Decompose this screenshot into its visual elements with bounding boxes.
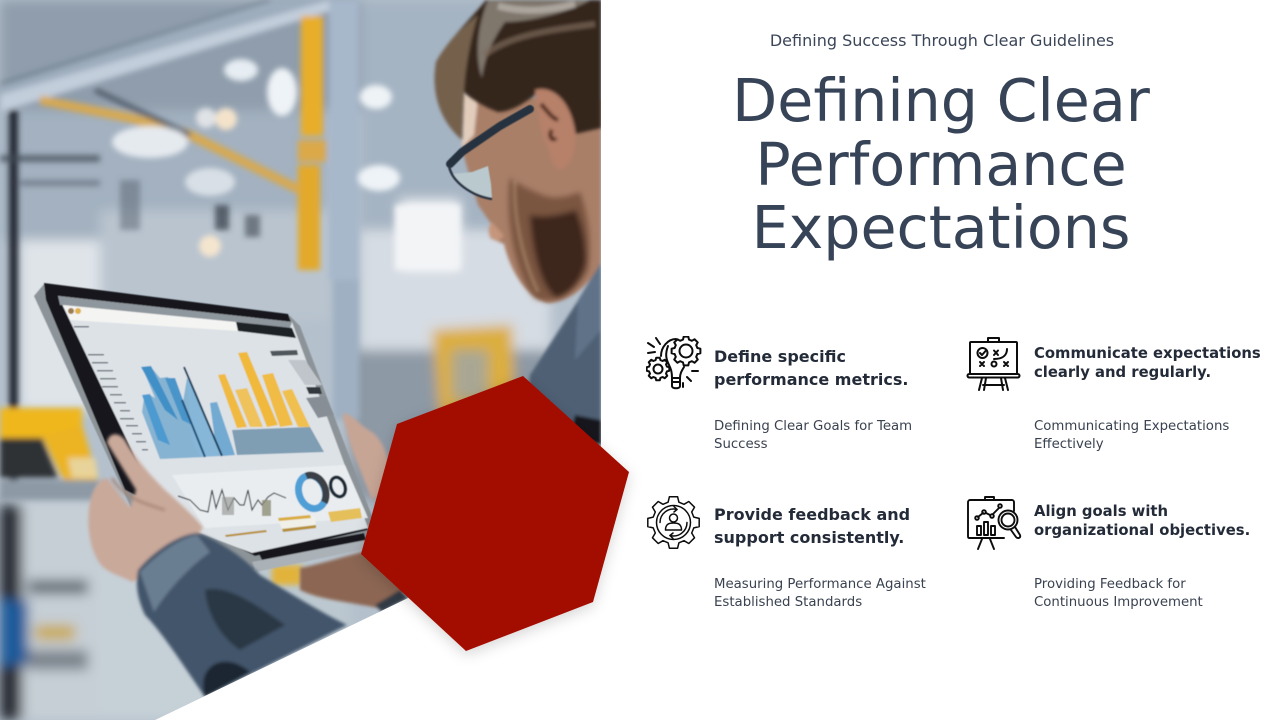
tablet with dashboard bbox=[34, 283, 378, 572]
main title: Defining Clear bbox=[732, 67, 1150, 135]
heading: align goals: Align goals with bbox=[1034, 503, 1168, 520]
heading: align goals bbox=[1034, 503, 1250, 539]
subtitle: Defining Success Through Clear Guidelines bbox=[770, 31, 1114, 50]
heading: communicate expectations: Communicate expectations bbox=[1034, 345, 1261, 362]
main title: Expectations bbox=[752, 194, 1130, 262]
description: define metrics bbox=[714, 419, 912, 452]
heading: provide feedback: Provide feedback and bbox=[714, 505, 910, 524]
description: communicate expectations: Communicating Expectations bbox=[1034, 419, 1229, 434]
heading: define metrics: performance metrics. bbox=[714, 370, 908, 389]
item: provide feedback bbox=[647, 496, 926, 610]
heading: communicate expectations: clearly and regularly. bbox=[1034, 364, 1211, 381]
icon: gear with person bbox=[647, 496, 700, 549]
description: provide feedback: Measuring Performance Against bbox=[714, 577, 926, 592]
heading: communicate expectations bbox=[1034, 345, 1261, 381]
main title bbox=[732, 67, 1150, 262]
icon: strategy board bbox=[966, 337, 1020, 391]
description: define metrics: Defining Clear Goals for Team bbox=[714, 419, 912, 434]
heading: align goals: organizational objectives. bbox=[1034, 522, 1250, 539]
photo: engineer reviewing tablet dashboard in factory bbox=[0, 0, 632, 720]
red hexagon bbox=[361, 376, 629, 651]
hands and sleeve bbox=[88, 414, 408, 697]
description: define metrics: Success bbox=[714, 437, 768, 452]
man's head bbox=[435, 0, 601, 445]
icon: lightbulb with gears bbox=[646, 336, 702, 390]
heading: define metrics: Define specific bbox=[714, 347, 846, 366]
description: provide feedback bbox=[714, 577, 926, 610]
heading: provide feedback bbox=[714, 505, 910, 547]
description: align goals: Providing Feedback for bbox=[1034, 577, 1186, 592]
item: define metrics bbox=[646, 336, 912, 452]
item: align goals bbox=[967, 496, 1250, 610]
heading: define metrics bbox=[714, 347, 908, 389]
icon: presentation chart with magnifier bbox=[967, 496, 1022, 550]
heading: provide feedback: support consistently. bbox=[714, 528, 904, 547]
main title: Performance bbox=[755, 130, 1127, 198]
description: communicate expectations: Effectively bbox=[1034, 437, 1104, 452]
glasses bbox=[449, 109, 530, 199]
description: align goals: Continuous Improvement bbox=[1034, 595, 1203, 610]
description: align goals bbox=[1034, 577, 1203, 610]
description: provide feedback: Established Standards bbox=[714, 595, 862, 610]
item: communicate expectations bbox=[966, 337, 1261, 452]
description: communicate expectations bbox=[1034, 419, 1229, 452]
